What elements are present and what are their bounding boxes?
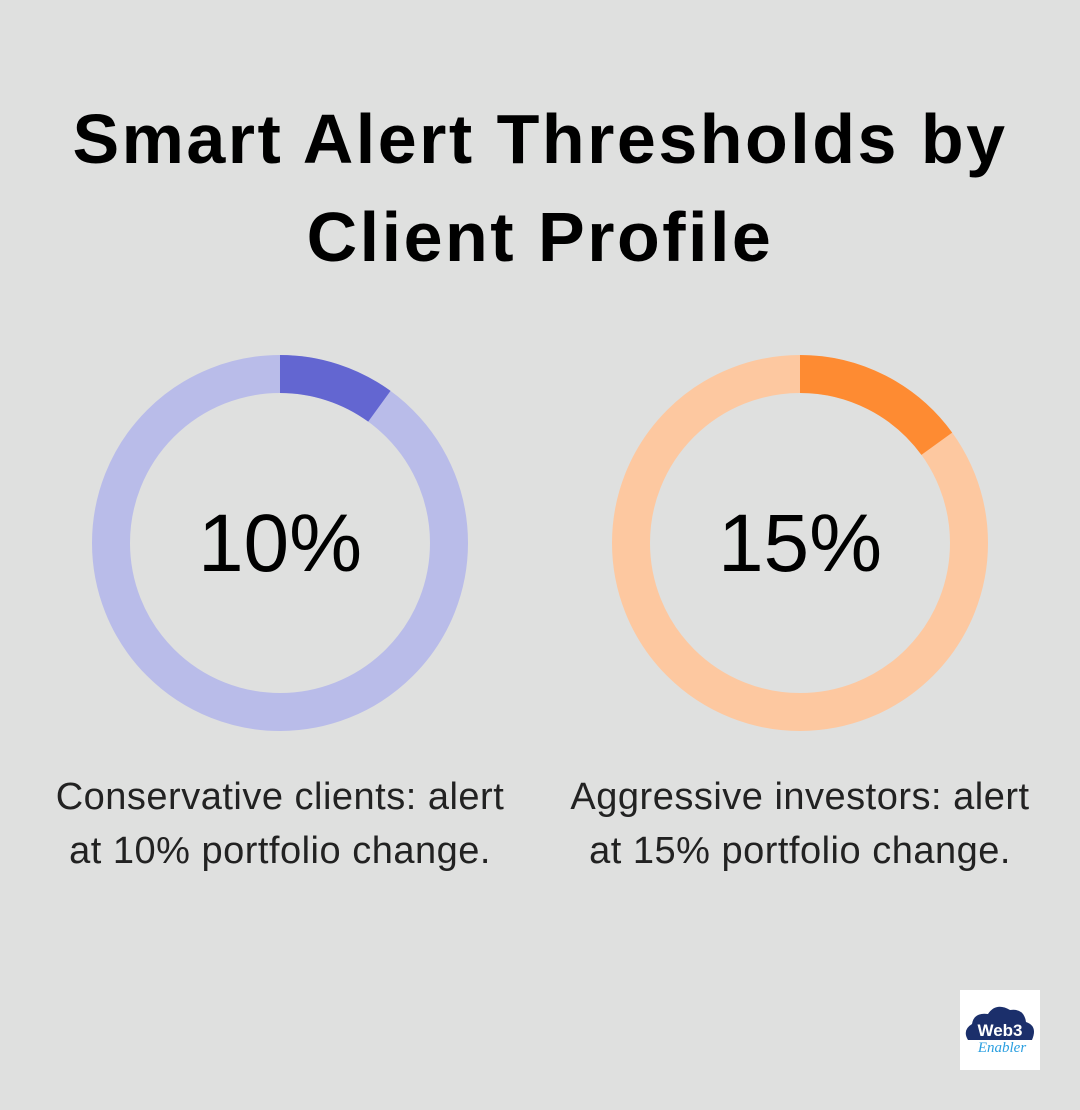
caption: aggressive: at 15% portfolio change.: [589, 830, 1011, 872]
logo: Web3: [977, 1021, 1023, 1040]
caption: conservative: at 10% portfolio change.: [69, 830, 491, 872]
logo: Enabler: [977, 1040, 1026, 1056]
title: [72, 100, 1008, 276]
donut chart: conservative 10%: 10%: [198, 498, 362, 589]
caption: conservative: Conservative clients: alert: [56, 776, 504, 818]
caption: aggressive: Aggressive investors: alert: [570, 776, 1030, 818]
caption: conservative: [56, 776, 504, 872]
donut chart: aggressive 15%: [612, 355, 988, 731]
caption: aggressive: [570, 776, 1030, 872]
donut chart: conservative 10%: [92, 355, 468, 731]
title: Smart Alert Thresholds by: [72, 100, 1008, 178]
logo: [960, 990, 1040, 1070]
title: Client Profile: [307, 198, 773, 276]
donut chart: aggressive 15%: 15%: [718, 498, 882, 589]
